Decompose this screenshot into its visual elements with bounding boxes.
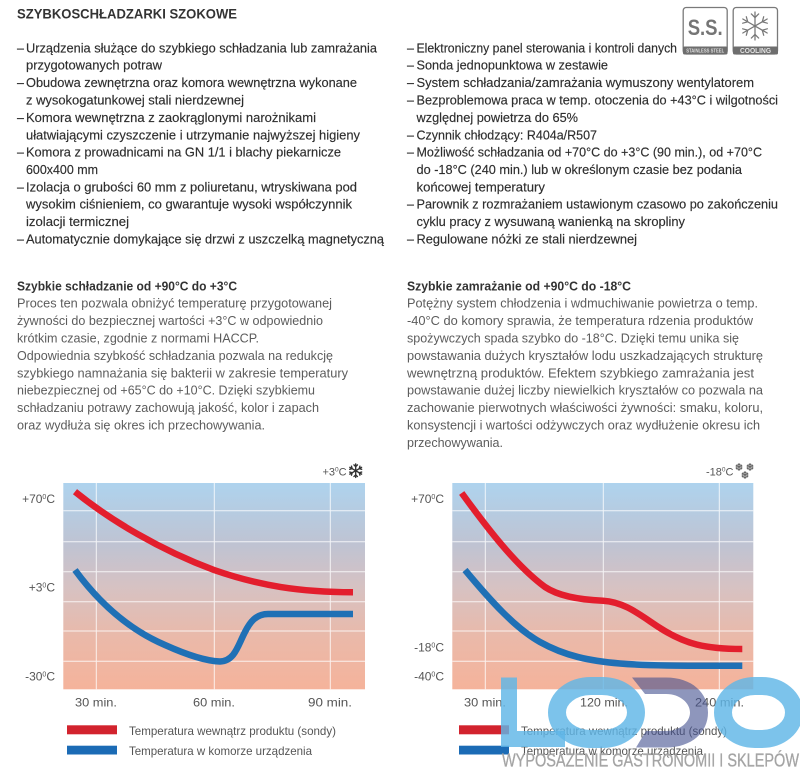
paragraph: rapid chilling: schładzaniu potrawy zachowują jakość, kolor i zapach [17,401,319,415]
left feature list: – [17,180,24,194]
y axis labels: C [435,492,444,506]
text block: rapid chilling [17,280,349,432]
logo letter L [501,678,565,747]
right feature list: System schładzania/zamrażania wymuszony wentylatorem [416,76,754,90]
product temperature curve [462,493,742,649]
left feature list: – [17,146,24,160]
product temperature curve [75,492,353,592]
y axis labels: -18 [414,641,431,655]
paragraph: rapid chilling: oraz wydłuża się okres ich przechowywania. [17,418,265,432]
paragraph: rapid freezing: powstawanie dużej liczby niewielkich kryształów co pozwala na [407,384,763,398]
right feature list: końcowej temperatury [416,180,546,194]
right feature list: Możliwość schładzania od +70°C do +3°C (90 min.), od +70°C [416,146,762,160]
y axis labels: C [435,641,444,655]
right feature list: – [407,146,414,160]
y axis labels: 0 [42,583,46,590]
paragraph: rapid chilling: niebezpiecznej od +65°C do +10°C. Dzięki szybkiemu [17,384,315,398]
paragraph: rapid freezing: konsystencji i wartości odżywczych oraz wydłużenie okresu ich [407,418,760,432]
left feature list: Izolacja o grubości 60 mm z poliuretanu, wtryskiwana pod [26,180,357,194]
legend: Temperatura w komorze urządzenia [521,744,703,758]
left feature list: Komora z prowadnicami na GN 1/1 i blachy piekarnicze [26,146,341,160]
left feature list: ułatwiającymi czyszczenie i utrzymanie najwyższej higieny [26,128,361,142]
x axis labels: 120 min. [580,696,628,710]
y axis labels: 0 [42,672,46,679]
logo letter D [632,678,708,748]
logo letter O [723,686,794,739]
right feature list: – [407,76,414,90]
y axis labels: -30 [25,670,42,684]
x axis labels [75,696,352,710]
right feature list: – [407,232,414,246]
legend [459,724,727,758]
legend: Temperatura wewnątrz produktu (sondy) [129,724,336,738]
chart target label: -18 C: 0 [722,466,726,474]
left feature list: Obudowa zewnętrzna oraz komora wewnętrzna wykonane [26,76,357,90]
right feature list: – [407,198,414,212]
left feature list: Urządzenia służące do szybkiego schładzania lub zamrażania [26,41,377,55]
left feature list: z wysokogatunkowej stali nierdzewnej [26,93,244,107]
paragraph: rapid freezing: przechowywania. [407,436,503,450]
icon: stainless steel badge: STAINLESS STEEL [686,48,724,54]
paragraph: rapid chilling: Odpowiednia szybkość schładzania pozwala na redukcję [17,349,333,363]
chart target label: +3 C [322,464,362,478]
paragraph: rapid freezing: spożywczych spada szybko do -18°C. Dzięki temu unika się [407,332,739,346]
y axis labels: 0 [431,643,435,650]
heading: rapid chilling: Szybkie schładzanie od +90°C do +3°C [17,280,237,294]
right feature list: – [407,128,414,142]
paragraph: rapid freezing: wewnętrzną produktów. Efektem szybkiego zamrażania jest [406,366,755,380]
x axis labels: 90 min. [308,696,352,710]
paragraph: rapid chilling: krótkim czasie, zgodnie z normami HACCP. [17,332,259,346]
x axis labels [464,696,744,710]
right feature list [407,41,778,246]
chart target label: +3 C: 0 [335,466,339,474]
heading: rapid freezing: Szybkie zamrażanie od +90°C do -18°C [407,280,631,294]
right feature list: względnej powietrza do 65% [415,111,578,125]
y axis labels: 0 [431,672,435,678]
chart target label: +3 C: +3 [322,466,335,478]
chart: rapid chilling [22,464,365,758]
right feature list: – [407,41,414,55]
chamber temperature curve [465,570,742,666]
y axis labels: +3 [29,581,42,595]
y axis labels: C [46,492,55,506]
left feature list: przygotowanych potraw [26,59,163,73]
right feature list: Bezproblemowa praca w temp. otoczenia do +43°C i wilgotności [416,93,778,107]
y axis labels: C [46,670,55,684]
left feature list: Automatycznie domykające się drzwi z uszczelką magnetyczną [26,232,384,246]
right feature list: – [407,58,414,72]
y axis labels: 0 [431,494,435,501]
left feature list: izolacji termicznej [26,215,129,229]
y axis labels: C [435,670,444,684]
icon: cooling badge [733,8,778,55]
paragraph: rapid freezing: zachowanie pierwotnych właściwości żywności: smaku, koloru, [407,401,763,415]
chart target label: +3 C: C [339,466,347,478]
legend [67,724,336,758]
icon: stainless steel badge [683,8,728,54]
legend: Temperatura wewnątrz produktu (sondy) [521,724,727,738]
paragraph: rapid chilling: Proces ten pozwala obniżyć temperaturę przygotowanej [17,297,332,311]
right feature list: cyklu pracy z wysuwaną wanienką na skropliny [416,215,686,229]
icon: stainless steel badge: S.S. [688,15,723,40]
title: SZYBKOSCHŁADZARKI SZOKOWE [17,6,237,22]
left feature list: – [17,76,24,90]
left feature list: 600x400 mm [26,163,98,177]
left feature list: wysokim ciśnieniem, co gwarantuje wysoki współczynnik [25,198,353,212]
y axis labels [22,492,55,684]
right feature list: do -18°C (240 min.) lub w określonym czasie bez podania [416,163,742,177]
paragraph: rapid chilling: żywności do bezpiecznej wartości +3°C w odpowiednio [17,314,323,328]
paragraph: rapid chilling [17,297,349,432]
paragraph: rapid freezing [406,297,763,450]
y axis labels: +70 [22,492,42,506]
y axis labels [411,492,444,684]
right feature list: Czynnik chłodzący: R404a/R507 [416,128,597,142]
y axis labels: +70 [411,492,431,506]
legend: Temperatura w komorze urządzenia [129,744,312,758]
right feature list: Parownik z rozmrażaniem ustawionym czasowo po zakończeniu [416,198,778,212]
right feature list: Sonda jednopunktowa w zestawie [416,58,608,72]
icon: cooling badge: COOLING [740,48,772,55]
x axis labels: 240 min. [695,696,744,710]
right feature list: – [407,93,414,107]
logo letter O [557,686,636,739]
left feature list: – [17,41,24,55]
x axis labels: 30 min. [75,696,117,710]
chart: rapid freezing [411,464,753,758]
left feature list: – [17,232,24,246]
right feature list: Regulowane nóżki ze stali nierdzewnej [416,232,637,246]
left feature list: – [17,111,24,125]
y axis labels: 0 [42,494,46,501]
watermark logo [501,678,799,769]
paragraph: rapid freezing: -40°C do komory sprawia, że temperatura rdzenia produktów [407,314,754,328]
text block: rapid freezing [406,280,763,450]
y axis labels: C [46,581,55,595]
chart target label: -18 C [706,464,753,478]
right feature list: Elektroniczny panel sterowania i kontroli danych [416,41,677,55]
paragraph: rapid freezing: powstawania dużych kryształów lodu uszkadzających strukturę [407,349,763,363]
x axis labels: 60 min. [193,696,235,710]
chart target label: -18 C: C [726,466,734,478]
left feature list: Komora wewnętrzna z zaokrąglonymi narożnikami [26,111,316,125]
chamber temperature curve [75,570,353,662]
left feature list [17,41,384,246]
y axis labels: -40 [414,670,431,684]
x axis labels: 30 min. [464,696,506,710]
paragraph: rapid chilling: szybkiego namnażania się bakterii w zakresie temperatury [17,366,349,380]
chart target label: -18 C: -18 [706,466,722,478]
paragraph: rapid freezing: Potężny system chłodzenia i wdmuchiwanie powietrza o temp. [407,297,758,311]
